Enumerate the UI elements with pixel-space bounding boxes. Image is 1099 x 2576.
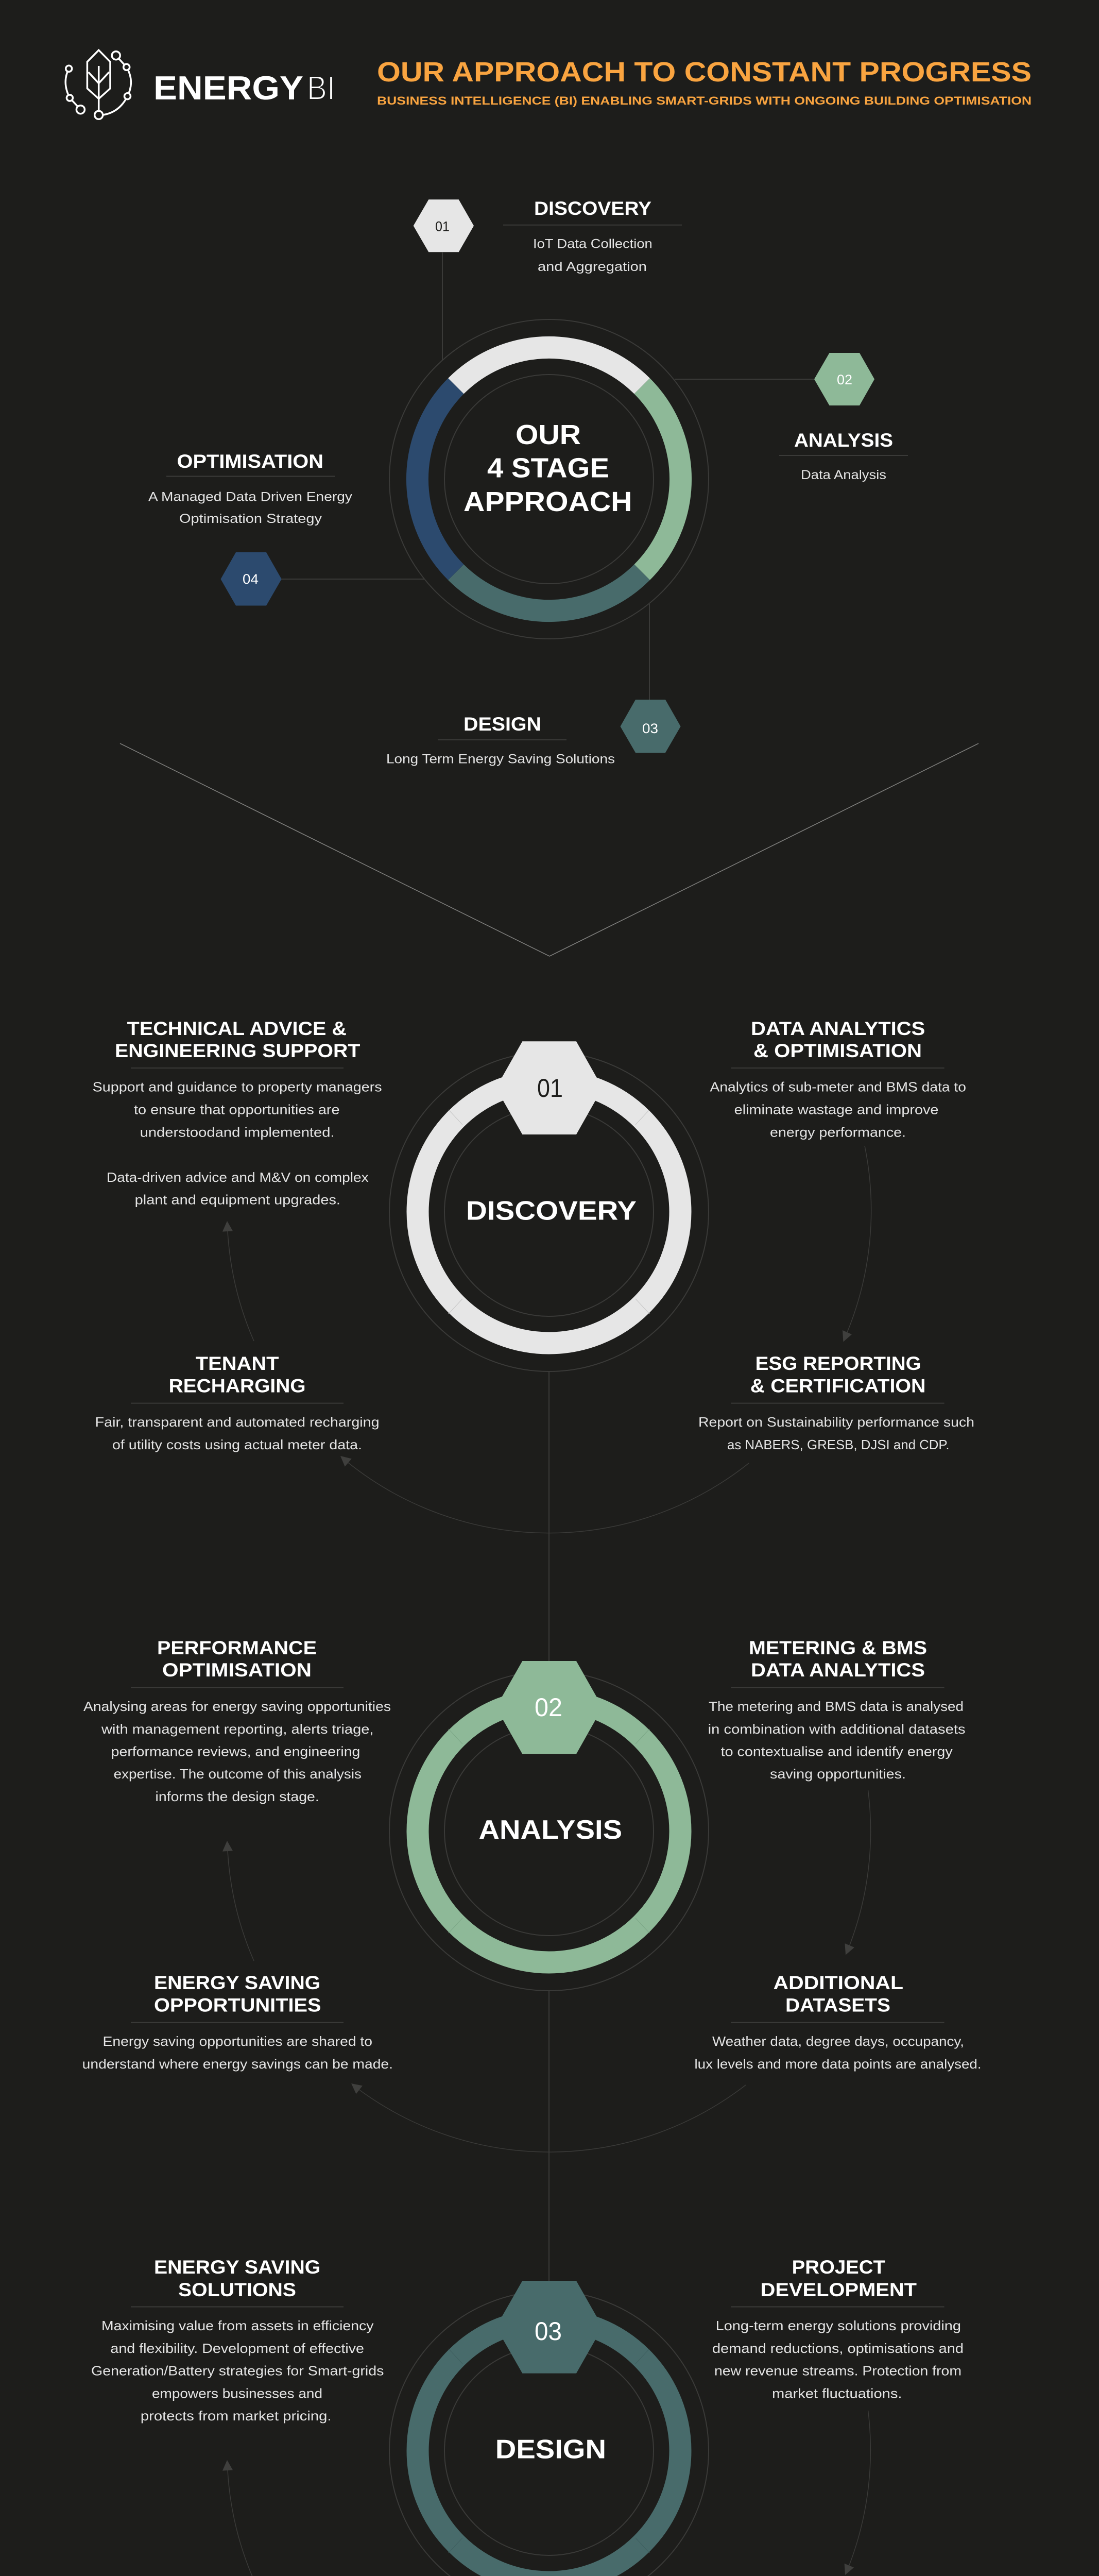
hexagon 01 [496,1041,603,1134]
block: tenant recharging: TENANT [196,1352,279,1374]
block: data analytics: Analytics of sub-meter and BMS data to [710,1079,966,1094]
overview inner ring [444,375,654,584]
block: metering and bms: METERING & BMS [749,1637,927,1658]
hexagon 02 [814,353,874,405]
icon: leaf circuit [65,50,131,119]
block: energy saving solutions: and flexibility. Development of effective [110,2341,364,2356]
block: metering and bms: saving opportunities. [770,1766,906,1782]
block: performance optimisation: OPTIMISATION [162,1659,312,1681]
block: performance optimisation: Analysing areas for energy saving opportunities [83,1699,391,1714]
design heading: DESIGN [463,713,541,735]
block: metering and bms: in combination with additional datasets [708,1721,966,1737]
panel: design [65,2256,1003,2576]
block: project development: new revenue streams. Protection from [714,2363,961,2379]
block: energy saving opportunities: ENERGY SAVING [154,1972,320,1993]
block: additional datasets: DATASETS [785,1994,890,2016]
hexagon 01: 01 [435,219,450,234]
block: technical advice: understoodand implemented. [140,1124,335,1140]
block: energy saving solutions: empowers businesses and [152,2385,322,2401]
hexagon 02: 02 [837,372,852,387]
block: esg reporting [698,1352,974,1452]
block: technical advice [93,1018,382,1208]
panel: discovery [93,1018,974,1662]
block: esg reporting: & CERTIFICATION [750,1375,926,1396]
block: tenant recharging [95,1352,380,1452]
block: project development: Long-term energy solutions providing [716,2318,961,2333]
optimisation text: Optimisation Strategy [179,512,322,526]
discovery heading: DISCOVERY [534,197,651,219]
discovery text: and Aggregation [538,260,647,274]
block: energy saving solutions [91,2256,384,2424]
analysis ring [389,1671,709,1991]
panel: analysis [82,1637,982,2281]
stage 01 summary [414,197,682,274]
donut chart: four stages [417,347,681,611]
block: metering and bms: DATA ANALYTICS [751,1659,925,1681]
design title: DESIGN [495,2435,606,2465]
hexagon 04 [220,552,282,606]
subtitle: BUSINESS INTELLIGENCE (BI) ENABLING SMART-GRIDS WITH ONGOING BUILDING OPTIMISATION [377,94,1032,107]
block: energy saving solutions: Generation/Battery strategies for Smart-grids [91,2363,384,2379]
discovery ring [389,1052,709,1371]
block: energy saving opportunities: OPPORTUNITIES [154,1994,321,2016]
stage 02 summary [779,353,908,482]
cycle arrows [222,1790,871,2152]
block: data analytics: & OPTIMISATION [753,1040,922,1061]
optimisation text: A Managed Data Driven Energy [148,489,353,504]
block: additional datasets [694,1972,982,2072]
block: energy saving opportunities: Energy saving opportunities are shared to [103,2033,372,2049]
block: additional datasets: lux levels and more data points are analysed. [694,2056,982,2072]
block: technical advice: plant and equipment upgrades. [135,1192,340,1208]
hexagon 03: 03 [535,2317,562,2346]
overview centre title: APPROACH [463,486,632,517]
block: energy saving solutions: SOLUTIONS [178,2279,296,2300]
analysis text: Data Analysis [801,468,886,482]
hexagon 01: 01 [537,1074,563,1103]
hexagon 01 [414,199,474,252]
hexagon 03 [496,2281,603,2374]
design ring [389,2291,709,2576]
block: technical advice: to ensure that opportunities are [134,1101,340,1117]
overview centre title: OUR [516,419,581,450]
optimisation heading: OPTIMISATION [177,450,323,472]
block: metering and bms: to contextualise and identify energy [721,1744,953,1759]
block: data analytics: eliminate wastage and improve [734,1101,938,1117]
block: esg reporting: as NABERS, GRESB, DJSI and CDP. [727,1437,950,1452]
discovery title: DISCOVERY [466,1196,637,1226]
stage 03 summary [386,700,681,767]
block: additional datasets: ADDITIONAL [774,1972,903,1993]
block: performance optimisation: performance reviews, and engineering [111,1744,360,1759]
hexagon 02 [496,1661,603,1754]
logo wordmark: ENERGY [153,69,303,107]
block: tenant recharging: of utility costs using actual meter data. [112,1437,362,1452]
overview centre title: 4 STAGE [487,452,609,483]
analysis heading: ANALYSIS [794,429,893,451]
block: project development: PROJECT [792,2256,885,2278]
title: OUR APPROACH TO CONSTANT PROGRESS [377,57,1032,88]
hexagon 03 [620,700,681,753]
block: performance optimisation: informs the design stage. [156,1789,319,1804]
block: data analytics [710,1018,966,1140]
overview outer ring [389,319,709,639]
cycle arrows [222,2411,870,2576]
block: esg reporting: ESG REPORTING [755,1352,921,1374]
panel: 4 stage overview [148,197,908,767]
connector lines [281,252,814,700]
block: energy saving opportunities: understand where energy savings can be made. [82,2056,393,2072]
hexagon 03: 03 [642,721,658,736]
block: technical advice: TECHNICAL ADVICE & [127,1018,347,1039]
block: project development [712,2256,964,2401]
overview centre title [463,419,632,517]
optimisation text [148,489,353,526]
block: technical advice: Support and guidance to property managers [93,1079,382,1094]
analysis title: ANALYSIS [479,1815,622,1845]
block: project development: demand reductions, optimisations and [712,2341,964,2356]
arrow: chevron divider [120,743,978,956]
block: project development: DEVELOPMENT [761,2279,917,2300]
block: performance optimisation: with management reporting, alerts triage, [101,1721,374,1737]
analysis connector line [548,1990,550,2281]
block: tenant recharging: RECHARGING [169,1375,306,1396]
block: data analytics: energy performance. [770,1124,906,1140]
stage 04 summary [148,450,353,606]
block: energy saving solutions: protects from market pricing. [141,2408,332,2424]
block: tenant recharging: Fair, transparent and automated recharging [95,1414,380,1430]
block: performance optimisation: expertise. The outcome of this analysis [114,1766,362,1782]
discovery connector line [548,1371,550,1662]
block: energy saving opportunities [82,1972,393,2072]
discovery text [533,237,652,274]
discovery text: IoT Data Collection [533,237,652,251]
block: additional datasets: Weather data, degree days, occupancy, [712,2033,964,2049]
block: technical advice: Data-driven advice and M&V on complex [107,1170,369,1185]
block: esg reporting: Report on Sustainability performance such [698,1414,974,1430]
logo wordmark: BI [307,69,335,107]
block: technical advice: ENGINEERING SUPPORT [115,1040,360,1061]
block: metering and bms: The metering and BMS data is analysed [709,1699,964,1714]
block: energy saving solutions: ENERGY SAVING [154,2256,320,2278]
cycle arrows [222,1146,871,1533]
block: performance optimisation [83,1637,391,1804]
block: data analytics: DATA ANALYTICS [751,1018,925,1039]
logo [65,50,335,119]
block: performance optimisation: PERFORMANCE [157,1637,317,1658]
design text: Long Term Energy Saving Solutions [386,752,615,767]
block: energy saving solutions: Maximising value from assets in efficiency [101,2318,374,2333]
block: project development: market fluctuations. [772,2385,902,2401]
header [65,50,1032,119]
hexagon 02: 02 [535,1693,562,1722]
block: metering and bms [708,1637,966,1782]
hexagon 04: 04 [243,571,259,587]
